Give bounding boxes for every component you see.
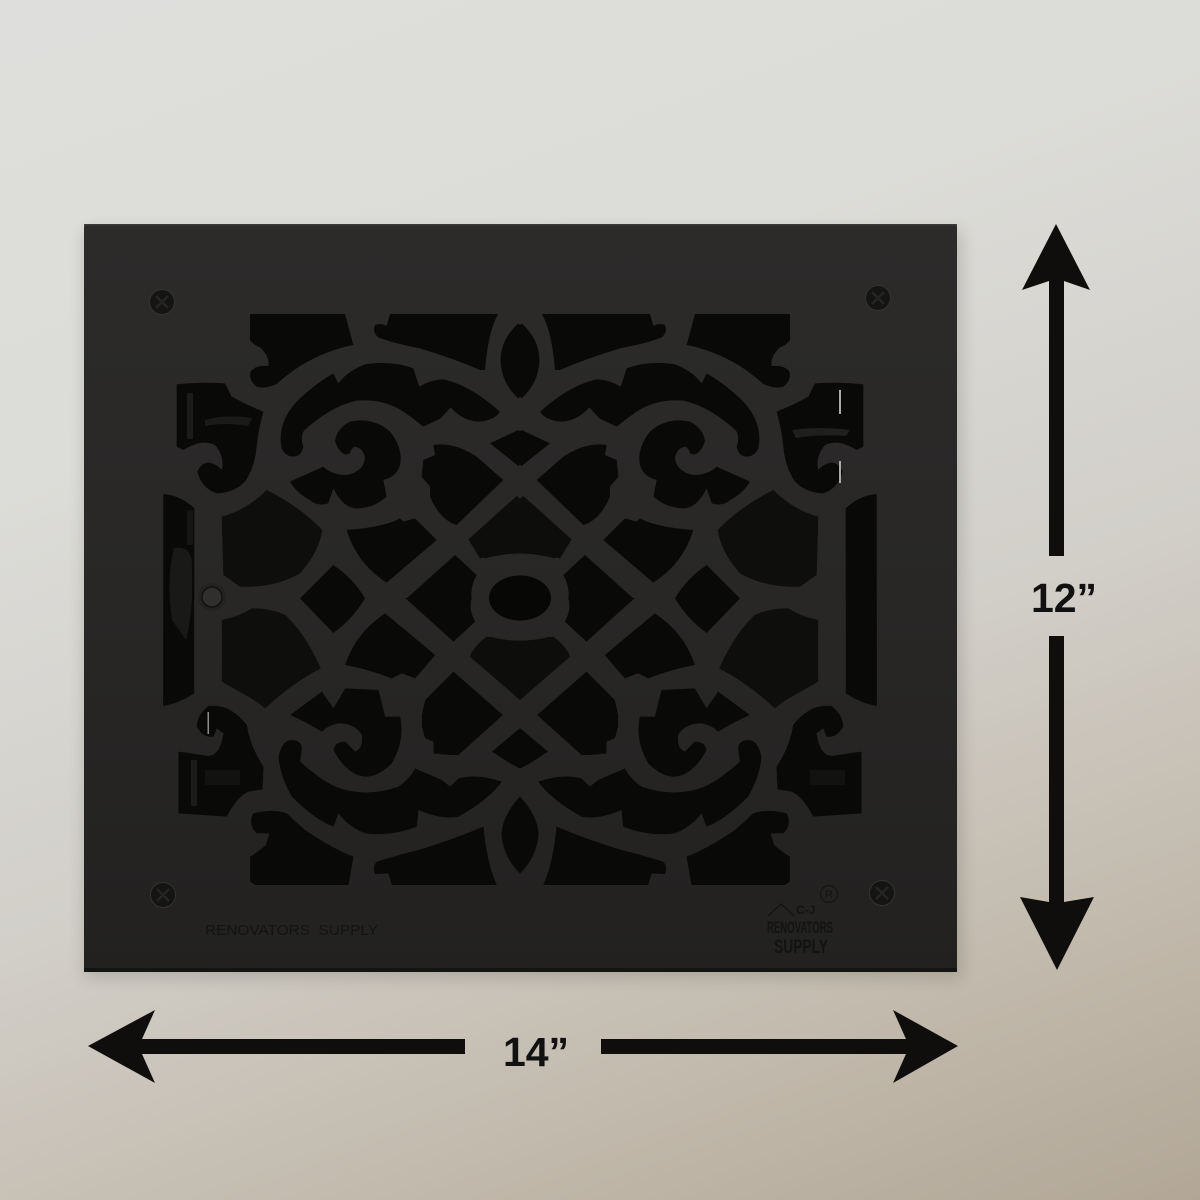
screw: top left bbox=[150, 290, 174, 314]
label: height: 12” bbox=[1031, 575, 1097, 621]
arrow: width right bbox=[601, 1010, 958, 1083]
brand logo bbox=[767, 886, 838, 958]
arrow: height top bbox=[1022, 224, 1090, 556]
grille pattern bbox=[163, 314, 877, 885]
damper knob bbox=[198, 583, 226, 611]
arrow: width left bbox=[88, 1010, 465, 1083]
damper hardware details bbox=[187, 390, 850, 806]
brand logo: R bbox=[825, 889, 833, 901]
screw: top right bbox=[866, 286, 890, 310]
screw: bottom left bbox=[150, 882, 176, 908]
brand logo: C-J bbox=[796, 903, 815, 917]
damper lever bbox=[169, 510, 193, 640]
panel: grille plate bbox=[84, 224, 957, 972]
brand logo: SUPPLY bbox=[774, 937, 828, 958]
engraved brand text: RENOVATORS SUPPLY bbox=[205, 922, 378, 939]
brand logo: RENOVATORS bbox=[767, 918, 833, 937]
arrow: height bottom bbox=[1020, 636, 1094, 970]
wall shadow bbox=[84, 230, 962, 978]
label: width: 14” bbox=[503, 1029, 569, 1075]
screw: bottom right bbox=[870, 880, 894, 906]
